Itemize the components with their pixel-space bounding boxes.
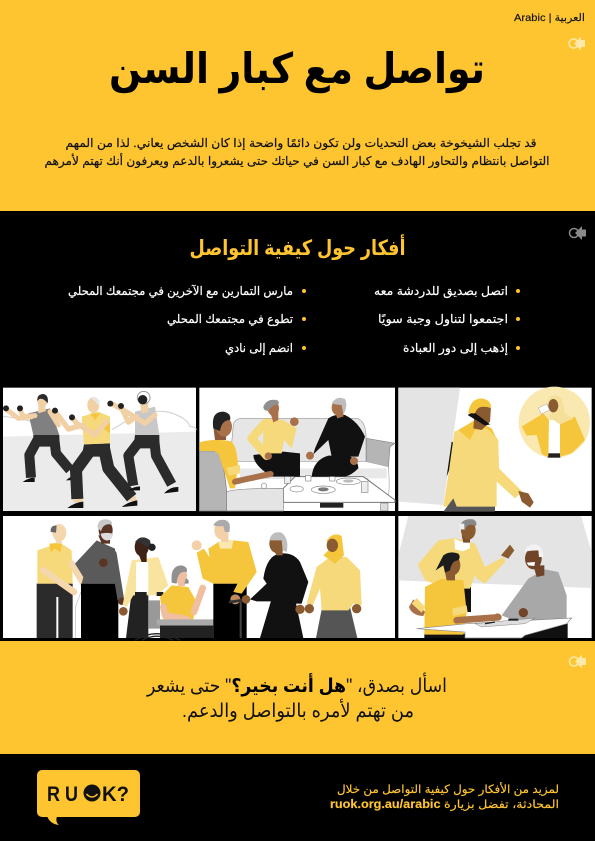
language label: Arabic | العربية bbox=[514, 12, 585, 24]
figure: woman in black bbox=[306, 398, 365, 477]
figure: girl in yellow bbox=[409, 552, 498, 638]
callout line two: من تهتم لأمره بالتواصل والدعم. bbox=[182, 699, 414, 722]
table with board game bbox=[417, 613, 572, 638]
ideas list: right column: اتصل بصديق للدردشة معه bbox=[374, 284, 508, 299]
ideas heading: أفكار حول كيفية التواصل bbox=[190, 233, 406, 260]
illustration: board game bbox=[398, 516, 592, 638]
figure: woman in hijab bbox=[305, 534, 362, 638]
table with cups and plates bbox=[261, 473, 395, 511]
illustration: phone call bbox=[398, 387, 592, 512]
footer text bbox=[330, 782, 559, 812]
footer panel bbox=[0, 754, 595, 841]
footer text: المحادثة، تفضل بزيارة ruok.org.au/arabic bbox=[330, 799, 559, 812]
intro paragraph bbox=[44, 136, 550, 169]
logo: R U OK?: R U bbox=[47, 783, 78, 806]
figure: right dancer bbox=[107, 391, 178, 493]
figure: standing man bbox=[418, 519, 514, 612]
header panel bbox=[0, 0, 595, 211]
figure: woman in cardigan bbox=[119, 537, 168, 638]
icon: audio speaker ideas bbox=[570, 226, 586, 240]
ideas list: left column: تطوع في مجتمعك المحلي bbox=[167, 312, 293, 327]
figure: man in dark grey sweater bbox=[75, 519, 125, 638]
intro paragraph: قد تجلب الشيخوخة بعض التحديات ولن تكون دائمًا واضحة إذا كان الشخص يعاني. لذا من المهم bbox=[66, 136, 536, 151]
ideas panel background bbox=[0, 211, 595, 641]
icon: audio speaker callout bbox=[570, 654, 586, 668]
ideas list: right column: إذهب إلى دور العبادة bbox=[403, 341, 508, 356]
figure: woman in wheelchair bbox=[135, 565, 215, 640]
ideas list: left column: مارس التمارين مع الآخرين في مجتمعك المحلي bbox=[68, 284, 293, 299]
logo: R U OK?: K? bbox=[102, 783, 129, 806]
circle inset: person on phone bbox=[519, 387, 590, 458]
figure: centre dancer bbox=[52, 397, 137, 508]
illustration: group exercise bbox=[3, 388, 196, 511]
figure: man from behind bbox=[199, 412, 271, 488]
figure: old man in grey bbox=[502, 545, 568, 638]
icon: audio speaker top bbox=[569, 36, 585, 50]
figure: left dancer bbox=[3, 394, 75, 482]
ideas list: left column bbox=[68, 284, 306, 355]
intro paragraph: التواصل بانتظام والتحاور الهادف مع كبار السن في حياتك حتى يشعروا بالدعم ويعرفون أنك تهتم لأمرهم bbox=[44, 153, 550, 169]
logo: R U OK? bbox=[37, 770, 140, 825]
illustration: group of older people bbox=[3, 516, 395, 640]
footer text: لمزيد من الأفكار حول كيفية التواصل من خلال bbox=[337, 782, 559, 797]
title: تواصل مع كبار السن bbox=[109, 45, 485, 94]
armchair bbox=[199, 452, 283, 511]
ideas list: left column: انضم إلى نادي bbox=[225, 341, 293, 355]
callout panel bbox=[0, 641, 595, 754]
illustration: friends on sofa bbox=[199, 388, 395, 511]
ideas list: right column bbox=[374, 284, 520, 356]
figure: woman in black bbox=[242, 532, 308, 638]
figure: woman on phone bbox=[443, 398, 534, 512]
callout line one: اسأل بصدق، "هل أنت بخير؟" حتى يشعر bbox=[146, 672, 447, 697]
figure: woman in yellow bbox=[252, 400, 300, 477]
figure: man in pale shirt bbox=[37, 524, 92, 638]
figure: man in yellow sweater bbox=[192, 520, 257, 638]
ideas list: right column: اجتمعوا لتناول وجبة سويًا bbox=[378, 312, 508, 327]
